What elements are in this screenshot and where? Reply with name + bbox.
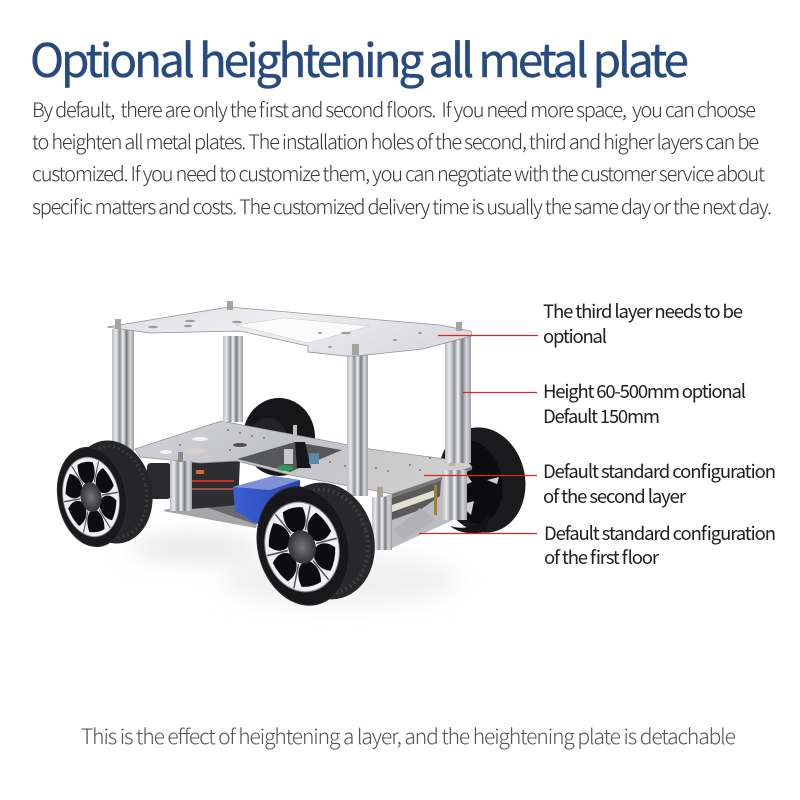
third layer plate [107,307,472,356]
caption: This is the effect of heightening a layer, and the heightening plate is detachable [81,721,736,751]
callout: height [543,378,746,429]
callout: height: Default 150mm [543,403,660,429]
callout: first floor: Default standard configuration [544,520,776,546]
front right wheel [245,472,388,615]
callout lines [419,336,538,534]
ground shadow [130,538,460,606]
intro text block: By default, there are only the first and second floors. If you need more space, you can choose [32,94,756,123]
rear right wheel [429,419,535,541]
second layer plate [135,421,472,498]
intro text block: customized. If you need to customize them, you can negotiate with the customer service about [32,158,765,187]
callout: second layer: Default standard configuration [543,458,776,484]
callout: first floor: of the first floor [544,544,660,570]
callout: third layer [543,298,743,349]
intro text block: to heighten all metal plates. The installation holes of the second, third and higher layers can be [32,126,759,155]
callout: third layer: optional [543,323,607,349]
front left wheel [50,433,162,552]
callout: height: Height 60-500mm optional [543,378,746,404]
callout: first floor [544,520,776,570]
intro text block: specific matters and costs. The customized delivery time is usually the same day or the next day. [32,191,772,220]
callout: second layer: of the second layer [543,483,687,509]
title: Optional heightening all metal plate [30,25,689,91]
bottom plate and electronics [147,460,453,548]
rear left wheel [243,398,315,476]
callout: second layer [543,458,776,509]
photo: four-wheel robot chassis [50,301,535,615]
short lower posts [170,425,467,550]
intro text block [32,94,772,220]
tall posts [112,329,471,496]
callout: third layer: The third layer needs to be [543,298,743,324]
plate bolts [115,301,462,355]
